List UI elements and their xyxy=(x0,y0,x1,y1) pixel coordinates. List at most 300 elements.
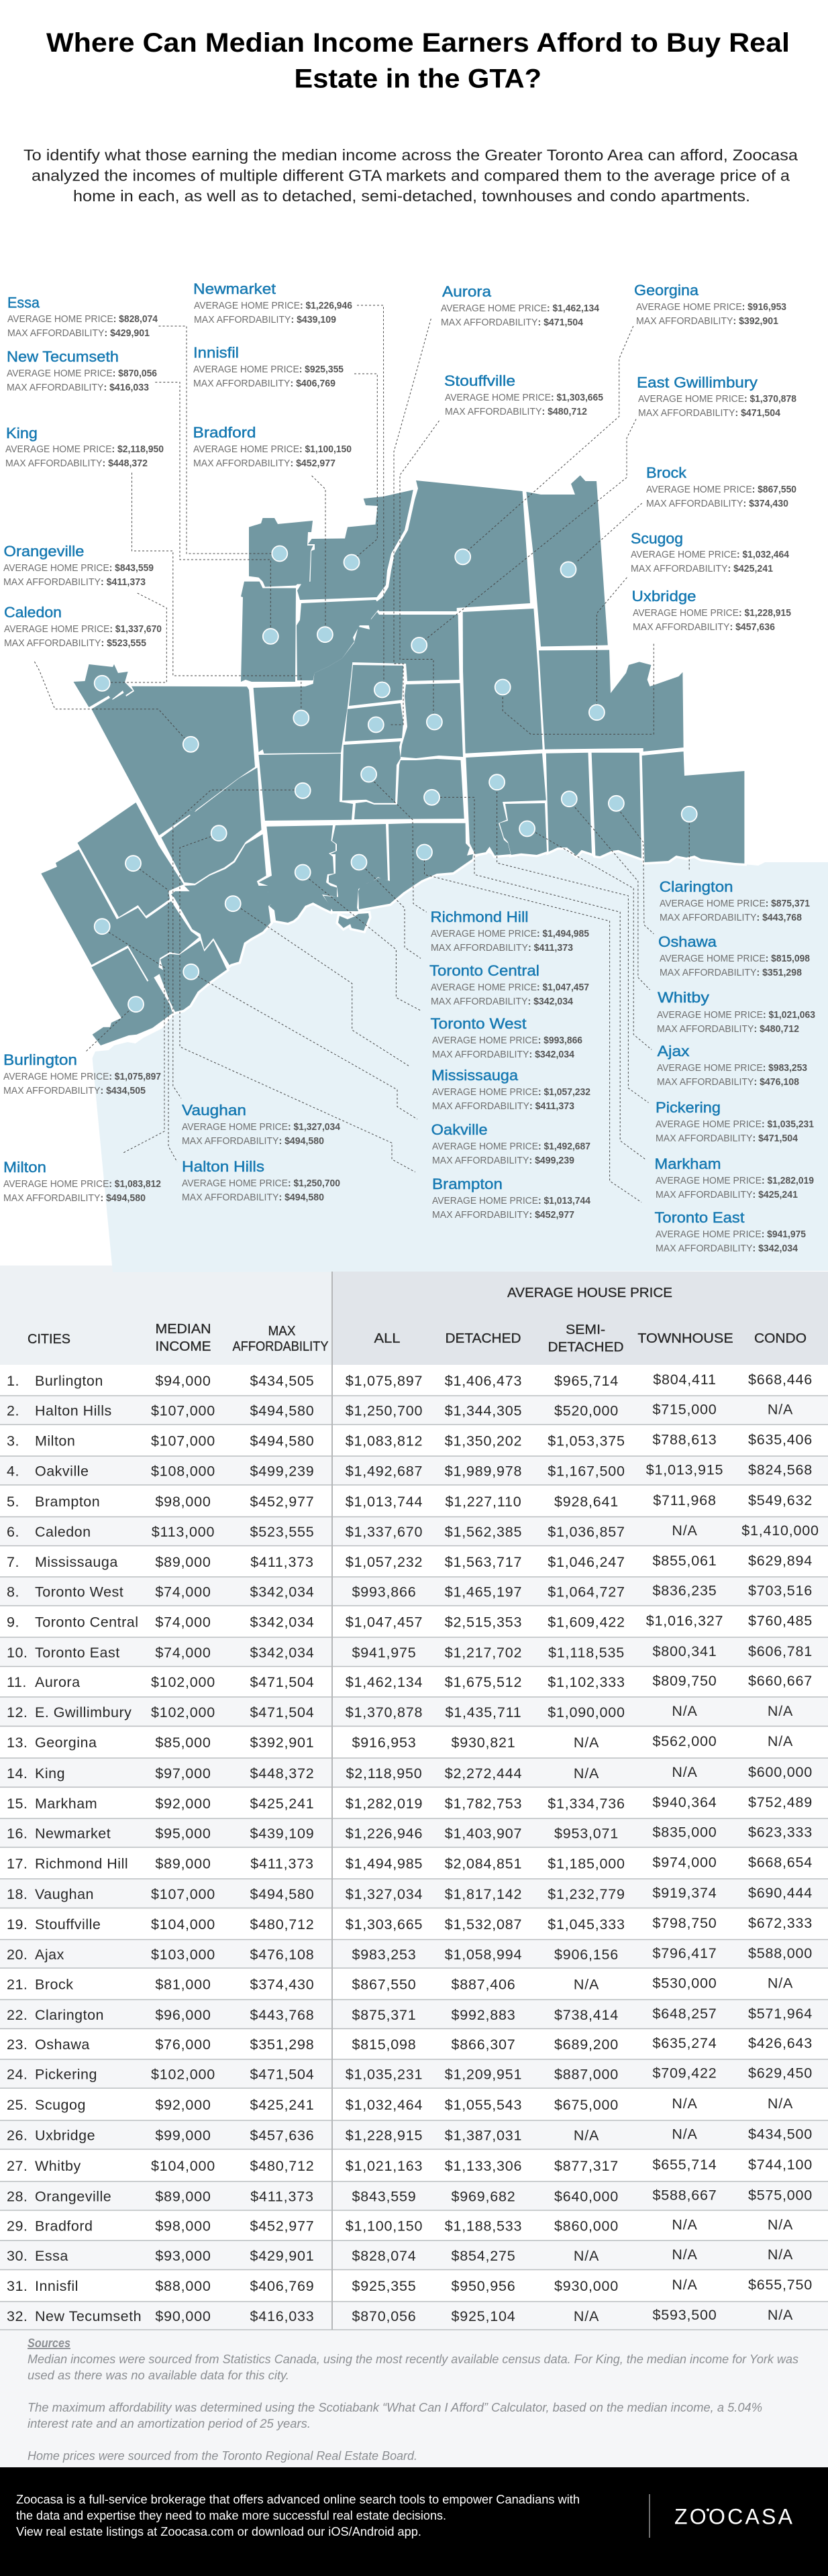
row 2: $1,250,700 xyxy=(346,1402,423,1419)
row 26: 26. xyxy=(7,2127,28,2143)
lake ontario xyxy=(93,847,828,1272)
row 8: $74,000 xyxy=(155,1584,211,1600)
label: Whitby: Whitby xyxy=(658,989,709,1006)
row 29: $1,100,150 xyxy=(346,2218,423,2234)
row 9: $760,485 xyxy=(748,1613,813,1629)
row 23: $351,298 xyxy=(250,2037,315,2053)
row 19: $104,000 xyxy=(151,1916,215,1933)
row 30: $429,901 xyxy=(250,2248,315,2264)
label: Essa xyxy=(7,294,158,339)
row 11: $660,667 xyxy=(748,1673,813,1689)
label: Vaughan: MAX AFFORDABILITY: $494,580 xyxy=(182,1136,324,1147)
label: Toronto East: AVERAGE HOME PRICE: $941,975 xyxy=(656,1229,806,1240)
row 25: $675,000 xyxy=(554,2097,619,2113)
label: Richmond Hill: Richmond Hill xyxy=(431,909,529,925)
row 30: N/A xyxy=(768,2247,793,2263)
label: Oakville xyxy=(431,1121,590,1166)
label: Orangeville: AVERAGE HOME PRICE: $843,559 xyxy=(3,563,154,574)
row 27: $1,021,163 xyxy=(346,2158,423,2174)
map xyxy=(0,305,828,1365)
row 25: $425,241 xyxy=(250,2097,315,2113)
row 1: $434,505 xyxy=(250,1373,315,1389)
row 8: Toronto West xyxy=(35,1584,123,1600)
row 18: $1,327,034 xyxy=(346,1886,423,1902)
region: Vaughan xyxy=(259,754,353,821)
row 13: $392,901 xyxy=(250,1735,315,1751)
row 21: N/A xyxy=(768,1975,793,1992)
footer text: Zoocasa is a full-service brokerage that offers advanced online search tools to empower Canadians with xyxy=(16,2493,580,2506)
row 26: N/A xyxy=(574,2127,599,2143)
region: Scugog xyxy=(463,609,543,754)
row 9: $74,000 xyxy=(155,1614,211,1631)
row 25: N/A xyxy=(768,2096,793,2112)
label: Milton: Milton xyxy=(3,1159,46,1176)
row 4: $1,013,915 xyxy=(646,1461,723,1478)
label: Toronto Central xyxy=(429,962,589,1007)
row 14 xyxy=(0,1758,828,1787)
row 20: $906,156 xyxy=(554,1947,619,1963)
row 14: $600,000 xyxy=(748,1764,813,1780)
row 15: $1,334,736 xyxy=(548,1796,625,1812)
region: Richmond Hill xyxy=(342,741,401,803)
table header: TOWNHOUSE xyxy=(637,1331,733,1346)
row 1: $804,411 xyxy=(653,1372,717,1388)
row 12: N/A xyxy=(672,1703,698,1719)
row 18 xyxy=(0,1879,828,1908)
row 11: $1,102,333 xyxy=(548,1674,625,1690)
row 12: $102,000 xyxy=(151,1704,215,1720)
intro text: analyzed the incomes of multiple different GTA markets and compared them to the average price of a xyxy=(32,166,790,184)
label: Stouffville: Stouffville xyxy=(444,372,515,389)
row 9: $1,609,422 xyxy=(548,1614,625,1631)
footer text xyxy=(16,2493,580,2538)
region: Bradford xyxy=(297,600,381,680)
label: Brampton: MAX AFFORDABILITY: $452,977 xyxy=(432,1210,574,1221)
row 8: $1,064,727 xyxy=(548,1584,625,1600)
logo: ZOOCASA xyxy=(674,2504,793,2528)
row 19: $672,333 xyxy=(748,1915,813,1931)
row 7: $855,061 xyxy=(652,1553,717,1569)
row 20: $983,253 xyxy=(352,1947,417,1963)
row 10: $606,781 xyxy=(748,1643,813,1659)
row 3: $1,053,375 xyxy=(548,1433,625,1449)
row 14: $2,118,950 xyxy=(346,1765,423,1782)
label: Uxbridge: AVERAGE HOME PRICE: $1,228,915 xyxy=(633,608,791,619)
row 2 xyxy=(0,1396,828,1425)
row 16: $95,000 xyxy=(155,1825,211,1841)
row 28: $969,682 xyxy=(451,2189,516,2205)
label: Caledon: AVERAGE HOME PRICE: $1,337,670 xyxy=(4,624,162,635)
row 22: $571,964 xyxy=(748,2006,813,2022)
row 16: $439,109 xyxy=(250,1825,315,1841)
location markers xyxy=(95,546,697,1012)
footer xyxy=(0,2467,828,2576)
row 2: $494,580 xyxy=(250,1402,315,1419)
row 16 xyxy=(0,1818,828,1847)
region: Whitby xyxy=(592,753,641,858)
label: Pickering: MAX AFFORDABILITY: $471,504 xyxy=(656,1133,798,1144)
row 30: $854,275 xyxy=(451,2248,516,2264)
row 23: 23. xyxy=(7,2037,28,2053)
row 2: $520,000 xyxy=(554,1402,619,1419)
row 16: $953,071 xyxy=(554,1825,619,1841)
region: Aurora xyxy=(349,665,403,706)
label: Toronto East xyxy=(655,1209,806,1254)
row 30: $828,074 xyxy=(352,2248,417,2264)
row 5: $549,632 xyxy=(748,1492,813,1508)
region: Toronto islands xyxy=(338,913,369,931)
row 6: $1,562,385 xyxy=(445,1524,522,1540)
row 20: 20. xyxy=(7,1947,28,1963)
row 25: N/A xyxy=(672,2096,698,2112)
row 16: $1,226,946 xyxy=(346,1825,423,1841)
row 17: $2,084,851 xyxy=(445,1856,522,1872)
row 11: $1,675,512 xyxy=(445,1674,522,1690)
row 28: $575,000 xyxy=(748,2187,813,2204)
row 19: $798,750 xyxy=(652,1915,717,1931)
row 27: 27. xyxy=(7,2158,28,2174)
label: Toronto West xyxy=(431,1015,582,1060)
label: Stouffville: AVERAGE HOME PRICE: $1,303,665 xyxy=(445,393,603,403)
row 25: $1,032,464 xyxy=(346,2097,423,2113)
row 27: $744,100 xyxy=(748,2157,813,2173)
region: Brampton xyxy=(161,768,262,884)
label: King: King xyxy=(6,425,38,442)
row 15: 15. xyxy=(7,1796,28,1812)
row 17: 17. xyxy=(7,1856,28,1872)
row 25 xyxy=(7,2096,793,2113)
label: Brock xyxy=(646,464,796,509)
row 21: Brock xyxy=(35,1977,73,1993)
row 23: Oshawa xyxy=(35,2037,90,2053)
row 24: $102,000 xyxy=(151,2067,215,2083)
row 21: $867,550 xyxy=(352,1977,417,1993)
row 20: $476,108 xyxy=(250,1947,315,1963)
row 22: $738,414 xyxy=(554,2007,619,2023)
row 5: $98,000 xyxy=(155,1494,211,1510)
row 24: $709,422 xyxy=(652,2065,717,2081)
row 23: $689,200 xyxy=(554,2037,619,2053)
row 32: $925,104 xyxy=(451,2308,516,2324)
label: Richmond Hill: MAX AFFORDABILITY: $411,373 xyxy=(431,943,573,954)
row 7: $1,563,717 xyxy=(445,1554,522,1570)
label: Richmond Hill: AVERAGE HOME PRICE: $1,494,985 xyxy=(431,929,589,939)
row 1: $965,714 xyxy=(554,1373,619,1389)
row 31: 31. xyxy=(7,2278,28,2294)
label: Brampton xyxy=(432,1176,590,1221)
row 17: $668,654 xyxy=(748,1855,813,1871)
row 11: $1,462,134 xyxy=(346,1674,423,1690)
label: Stouffville: MAX AFFORDABILITY: $480,712 xyxy=(445,407,587,417)
label: East Gwillimbury: MAX AFFORDABILITY: $471,504 xyxy=(638,408,780,419)
label: Newmarket: AVERAGE HOME PRICE: $1,226,946 xyxy=(194,301,352,311)
row 29: Bradford xyxy=(35,2218,93,2234)
label: New Tecumseth: New Tecumseth xyxy=(7,348,119,365)
row 8: $993,866 xyxy=(352,1584,417,1600)
row 4: 4. xyxy=(7,1463,19,1479)
label: Markham: AVERAGE HOME PRICE: $1,282,019 xyxy=(656,1176,814,1186)
row 10: $800,341 xyxy=(652,1643,717,1659)
row 8: $836,235 xyxy=(652,1582,717,1598)
row 24: $471,504 xyxy=(250,2067,315,2083)
row 12: 12. xyxy=(7,1704,28,1720)
row 19: $480,712 xyxy=(250,1916,315,1933)
label: Aurora xyxy=(441,283,599,328)
row 26: $434,500 xyxy=(748,2126,813,2142)
row 9: $1,016,327 xyxy=(646,1613,723,1629)
label: Newmarket: Newmarket xyxy=(193,280,276,297)
row 17: $974,000 xyxy=(652,1855,717,1871)
table header xyxy=(28,1272,828,1365)
row 24: $629,450 xyxy=(748,2065,813,2081)
row 22: $96,000 xyxy=(155,2007,211,2023)
row 16: Newmarket xyxy=(35,1825,111,1841)
row 25: Scugog xyxy=(35,2097,86,2113)
row 23: $635,274 xyxy=(652,2035,717,2051)
row 3: $635,406 xyxy=(748,1432,813,1448)
region: Clarington xyxy=(642,752,744,864)
footer text: the data and expertise they need to make more successful real estate decisions. xyxy=(16,2509,446,2522)
row 27: $1,133,306 xyxy=(445,2158,522,2174)
row 22: $992,883 xyxy=(451,2007,516,2023)
row 13: N/A xyxy=(574,1735,599,1751)
region: King xyxy=(254,643,354,754)
row 6 xyxy=(0,1516,828,1546)
row 24 xyxy=(0,2059,828,2088)
row 24: $1,035,231 xyxy=(346,2067,423,2083)
row 22: $875,371 xyxy=(352,2007,417,2023)
row 6: $113,000 xyxy=(152,1524,215,1540)
label: King xyxy=(5,425,164,469)
row 18: $494,580 xyxy=(250,1886,315,1902)
sources: The maximum affordability was determined using the Scotiabank “What Can I Afford” Calculator, based on the median income, a 5.04% xyxy=(28,2401,762,2414)
label: Milton xyxy=(3,1159,161,1204)
title xyxy=(46,28,790,94)
label: King: MAX AFFORDABILITY: $448,372 xyxy=(5,458,148,469)
region: Burlington xyxy=(91,948,172,1045)
footer text: View real estate listings at Zoocasa.com or download our iOS/Android app. xyxy=(16,2525,421,2538)
label: Clarington: Clarington xyxy=(660,878,733,895)
row 11: 11. xyxy=(7,1674,27,1690)
row 6: $1,410,000 xyxy=(741,1523,819,1539)
label: Oakville: MAX AFFORDABILITY: $499,239 xyxy=(432,1155,574,1166)
label: Vaughan: Vaughan xyxy=(182,1102,246,1119)
region: Pickering xyxy=(499,803,547,855)
label: Georgina: AVERAGE HOME PRICE: $916,953 xyxy=(636,302,786,313)
row 24: $887,000 xyxy=(554,2067,619,2083)
row 21 xyxy=(7,1975,793,1993)
label: Newmarket: MAX AFFORDABILITY: $439,109 xyxy=(194,315,336,325)
row 19 xyxy=(7,1915,813,1933)
row 1 xyxy=(7,1372,813,1389)
row 16: $623,333 xyxy=(748,1824,813,1840)
row 13: $916,953 xyxy=(352,1735,417,1751)
row 3: $1,350,202 xyxy=(445,1433,522,1449)
row 2: 2. xyxy=(7,1402,19,1419)
row 6: $523,555 xyxy=(250,1524,315,1540)
sources xyxy=(0,2330,828,2467)
label: Toronto East: MAX AFFORDABILITY: $342,034 xyxy=(656,1243,798,1254)
label: Brock: MAX AFFORDABILITY: $374,430 xyxy=(646,499,788,509)
row 7: $1,046,247 xyxy=(548,1554,625,1570)
row 3 xyxy=(7,1432,813,1449)
label: Oshawa: MAX AFFORDABILITY: $351,298 xyxy=(660,968,802,978)
row 13: N/A xyxy=(768,1733,793,1749)
region: Brock xyxy=(526,475,608,647)
row 1: $94,000 xyxy=(155,1373,211,1389)
row 19: $1,532,087 xyxy=(445,1916,522,1933)
row 2: $1,344,305 xyxy=(445,1402,522,1419)
label: Georgina: MAX AFFORDABILITY: $392,901 xyxy=(636,316,778,327)
row 22: $443,768 xyxy=(250,2007,315,2023)
row 27: $480,712 xyxy=(250,2158,315,2174)
label: Vaughan xyxy=(182,1102,340,1147)
sources: Sources xyxy=(28,2336,70,2350)
row 32: $90,000 xyxy=(155,2308,211,2324)
row 32: $416,033 xyxy=(250,2308,315,2324)
row 8: $342,034 xyxy=(250,1584,315,1600)
label: Richmond Hill xyxy=(431,909,589,954)
row 1: $1,075,897 xyxy=(346,1373,423,1389)
region: New Tecumseth xyxy=(241,582,296,682)
row 1: $1,406,473 xyxy=(445,1373,522,1389)
row 4: $1,989,978 xyxy=(445,1463,522,1479)
region: Milton xyxy=(41,849,199,981)
label: Essa: AVERAGE HOME PRICE: $828,074 xyxy=(7,314,158,325)
row 31: $88,000 xyxy=(155,2278,211,2294)
row 27: Whitby xyxy=(35,2158,81,2174)
row 5: Brampton xyxy=(35,1494,100,1510)
label: Aurora: MAX AFFORDABILITY: $471,504 xyxy=(441,317,583,328)
row 24: $1,209,951 xyxy=(445,2067,522,2083)
label: Pickering: Pickering xyxy=(656,1099,721,1116)
table header: AVERAGE HOUSE PRICE xyxy=(507,1286,672,1300)
region: Toronto Central xyxy=(323,824,388,911)
label: Markham xyxy=(655,1155,814,1200)
row 7: $411,373 xyxy=(250,1554,314,1570)
row 21: N/A xyxy=(574,1977,599,1993)
label: Georgina: Georgina xyxy=(634,282,699,299)
region: Toronto East xyxy=(358,823,473,909)
row 19: Stouffville xyxy=(35,1916,101,1933)
region: Markham north xyxy=(354,759,464,819)
label: Uxbridge: MAX AFFORDABILITY: $457,636 xyxy=(633,622,775,633)
row 2: $715,000 xyxy=(652,1401,717,1417)
row 13 xyxy=(7,1733,793,1751)
row 2: Halton Hills xyxy=(35,1402,112,1419)
row 11: Aurora xyxy=(35,1674,81,1690)
label: Halton Hills xyxy=(182,1158,340,1203)
label: Uxbridge xyxy=(632,588,791,633)
region: Innisfil xyxy=(297,490,413,600)
label: Markham: Markham xyxy=(655,1155,721,1172)
row 6: $1,036,857 xyxy=(548,1524,625,1540)
row 20: $103,000 xyxy=(151,1947,215,1963)
row 28: 28. xyxy=(7,2189,28,2205)
row 8: $703,516 xyxy=(748,1582,813,1598)
row 21: $530,000 xyxy=(652,1975,717,1992)
label: Bradford xyxy=(193,424,352,469)
row 23: $426,643 xyxy=(748,2035,813,2051)
row 16: $1,403,907 xyxy=(445,1825,522,1841)
table header: INCOME xyxy=(156,1339,211,1354)
label: Brampton: AVERAGE HOME PRICE: $1,013,744 xyxy=(432,1196,590,1206)
label: Ajax: MAX AFFORDABILITY: $476,108 xyxy=(657,1077,799,1088)
land regions xyxy=(41,475,744,1045)
row 30 xyxy=(0,2240,828,2269)
row 6: 6. xyxy=(7,1524,19,1540)
label: Caledon xyxy=(4,604,162,649)
row 3: $107,000 xyxy=(151,1433,215,1449)
intro text: home in each, as well as to detached, semi-detached, townhouses and condo apartments. xyxy=(73,187,750,205)
row 29: N/A xyxy=(672,2217,698,2233)
row 29: $860,000 xyxy=(554,2218,619,2234)
label: Essa: Essa xyxy=(7,294,40,311)
row 18: Vaughan xyxy=(35,1886,94,1902)
row 7: $89,000 xyxy=(155,1554,211,1570)
table header: SEMI- xyxy=(566,1323,605,1337)
table header: CONDO xyxy=(754,1331,807,1346)
row 30: Essa xyxy=(35,2248,68,2264)
region: Stouffville xyxy=(401,683,463,758)
row 10: $1,217,702 xyxy=(445,1645,522,1661)
row 19: $1,303,665 xyxy=(346,1916,423,1933)
row 21: $887,406 xyxy=(451,1977,516,1993)
row 17: $89,000 xyxy=(155,1856,211,1872)
label: Clarington: MAX AFFORDABILITY: $443,768 xyxy=(660,913,802,923)
region: Uxbridge xyxy=(539,650,684,752)
label: Toronto East: Toronto East xyxy=(655,1209,745,1226)
region: Ajax xyxy=(546,753,592,856)
row 29 xyxy=(7,2217,793,2234)
label: Burlington: MAX AFFORDABILITY: $434,505 xyxy=(3,1086,146,1096)
row 2: $107,000 xyxy=(151,1402,215,1419)
row 25: $1,055,543 xyxy=(445,2097,522,2113)
label: Clarington xyxy=(660,878,810,923)
sources: Median incomes were sourced from Statistics Canada, using the most recently available census data. For King, the median income for York was xyxy=(28,2353,798,2366)
label: Mississauga: Mississauga xyxy=(431,1067,519,1084)
sources: interest rate and an amortization period of 25 years. xyxy=(28,2417,311,2430)
region: Markham xyxy=(466,754,546,856)
label: Aurora: AVERAGE HOME PRICE: $1,462,134 xyxy=(441,303,599,314)
row 27: $104,000 xyxy=(151,2158,215,2174)
row 22 xyxy=(0,2000,828,2028)
row 11: $471,504 xyxy=(250,1674,315,1690)
row 29: $1,188,533 xyxy=(445,2218,522,2234)
row 15: $1,282,019 xyxy=(346,1796,423,1812)
row 28: $588,667 xyxy=(652,2187,717,2204)
label: East Gwillimbury: East Gwillimbury xyxy=(637,374,758,391)
table header: MAX xyxy=(268,1324,295,1339)
label: Georgina xyxy=(634,282,786,327)
row 26 xyxy=(0,2120,828,2149)
row 22: 22. xyxy=(7,2007,28,2023)
row 11: $809,750 xyxy=(652,1673,717,1689)
row 6: $1,337,670 xyxy=(346,1524,423,1540)
row 13: $930,821 xyxy=(451,1735,516,1751)
row 4: $1,492,687 xyxy=(346,1463,423,1479)
row 12: $1,370,878 xyxy=(346,1704,423,1720)
row 20: Ajax xyxy=(35,1947,64,1963)
row 24: 24. xyxy=(7,2067,28,2083)
label: Aurora: Aurora xyxy=(442,283,492,300)
label: Caledon: Caledon xyxy=(4,604,62,621)
label: New Tecumseth: AVERAGE HOME PRICE: $870,056 xyxy=(7,368,157,379)
label: Halton Hills: AVERAGE HOME PRICE: $1,250,700 xyxy=(182,1178,340,1189)
row 10: $342,034 xyxy=(250,1645,315,1661)
table header: CITIES xyxy=(28,1332,70,1347)
row 10: $74,000 xyxy=(155,1645,211,1661)
